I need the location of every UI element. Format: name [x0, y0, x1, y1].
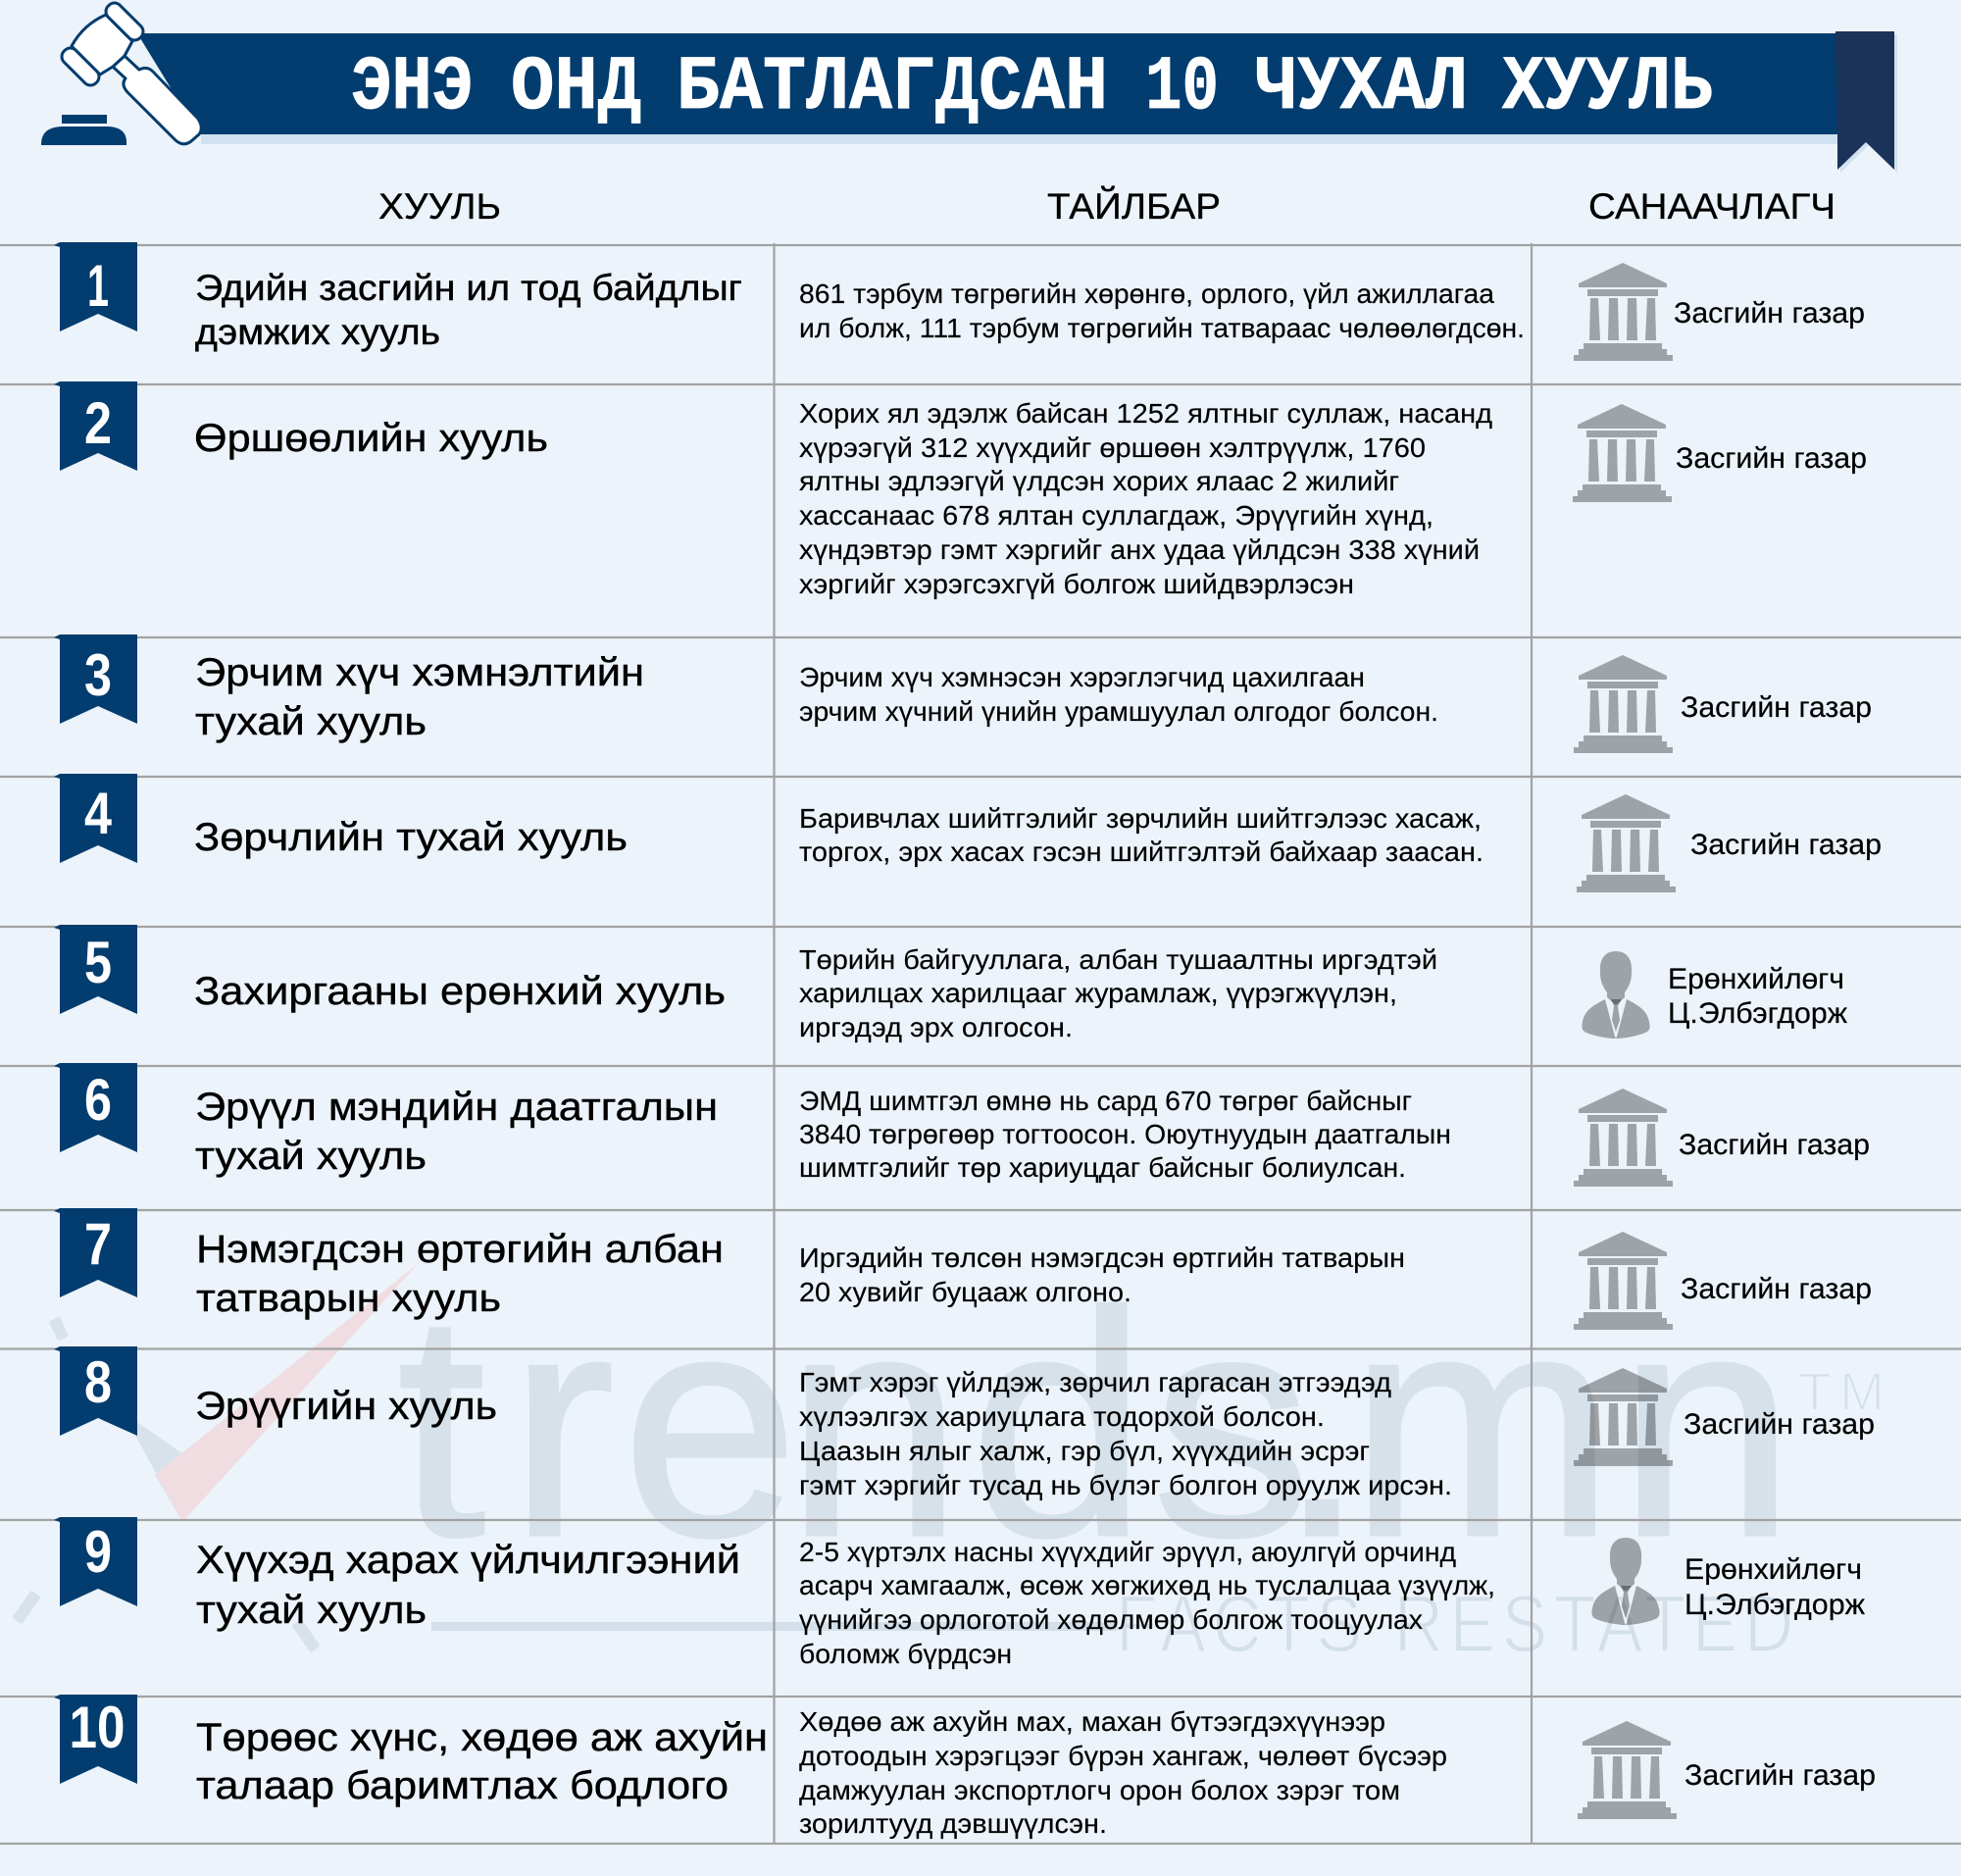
law title: Эрүүгийн хууль [195, 1385, 497, 1428]
description: Төрийн байгууллага, албан тушаалтны иргэдтэй [799, 944, 1437, 975]
watermark: trends.mn facts restated: TM [1798, 1361, 1885, 1422]
ribbon number 6: 6 [84, 1067, 112, 1133]
initiator: Засгийн газар [1684, 1759, 1876, 1792]
row 8 [54, 1346, 1875, 1500]
description [799, 1706, 1447, 1839]
law title [196, 1539, 740, 1632]
description: Эрчим хүч хэмнэсэн хэрэглэгчид цахилгаан [799, 662, 1365, 692]
law title: Төрөөс хүнс, хөдөө аж ахуйн [196, 1716, 768, 1759]
title text [351, 45, 1713, 131]
ribbon number 4: 4 [84, 781, 113, 846]
ribbon number 10 [54, 1695, 137, 1784]
description: үүнийгээ орлоготой хөдөлмөр болгож тооцуулах [799, 1604, 1423, 1635]
row 4 [54, 774, 1882, 892]
initiator: Засгийн газар [1681, 691, 1872, 724]
ribbon number 5: 5 [84, 930, 112, 995]
watermark: trends.mn facts restated: FACTS RESTATED [1116, 1578, 1800, 1669]
title text: БАТЛАГДСАН [677, 45, 1108, 131]
law title [195, 1086, 718, 1178]
description [799, 279, 1525, 343]
ribbon number 5 [54, 925, 137, 1014]
row 5 [54, 925, 1847, 1042]
row 9 [54, 1517, 1865, 1669]
initiator: Засгийн газар [1676, 442, 1867, 475]
icon: government building [1577, 794, 1676, 892]
row 3 [54, 634, 1872, 753]
description: шимтгэлийг төр хариуцдаг байсныг болиулсан. [799, 1152, 1406, 1183]
law title: талаар баримтлах бодлого [196, 1764, 729, 1807]
ribbon number 1 [54, 242, 137, 331]
law title [195, 651, 644, 743]
description: хассанаас 678 ялтан суллагдаж, Эрүүгийн хүнд, [799, 500, 1433, 531]
ribbon number 3: 3 [84, 642, 112, 708]
title text: ОНД [511, 45, 641, 131]
ribbon number 6 [54, 1063, 137, 1152]
law title: татварын хууль [196, 1277, 501, 1320]
row 1 [54, 242, 1865, 361]
icon: government building [1573, 404, 1672, 502]
title text: ЭНЭ [351, 45, 473, 131]
initiator [1668, 963, 1847, 1030]
description: Гэмт хэрэг үйлдэж, зөрчил гаргасан этгээдэд [799, 1367, 1391, 1397]
initiator: Засгийн газар [1690, 829, 1882, 861]
law title: Захиргааны ерөнхий хууль [194, 970, 726, 1013]
initiator: Ерөнхийлөгч [1668, 963, 1844, 995]
description: дотоодын хэрэгцээг бүрэн хангаж, чөлөөт бүсээр [799, 1741, 1447, 1771]
description: Хорих ял эдэлж байсан 1252 ялтныг суллаж, насанд [799, 398, 1492, 429]
description [799, 803, 1483, 867]
icon: president person [1582, 951, 1650, 1039]
description: иргэдэд эрх олгосон. [799, 1012, 1073, 1042]
description: эрчим хүчний үнийн урамшуулал олгодог болсон. [799, 696, 1438, 727]
description: гэмт хэргийг тусад нь бүлэг болгон оруулж ирсэн. [799, 1470, 1452, 1500]
icon: gavel [41, 0, 201, 145]
watermark: trends.mn facts restated [12, 1246, 1885, 1669]
law title: Зөрчлийн тухай хууль [194, 816, 628, 859]
initiator: Ц.Элбэгдорж [1668, 997, 1847, 1030]
icon: government building [1574, 655, 1673, 753]
ribbon number 8: 8 [84, 1349, 112, 1415]
initiator: Ерөнхийлөгч [1684, 1553, 1862, 1586]
ribbon number 8 [54, 1346, 137, 1436]
title text: ХУУЛЬ [1502, 45, 1713, 131]
row 6 [54, 1063, 1870, 1187]
description: ялтны эдлээгүй үлдсэн хорих ялаас 2 жилийг [799, 466, 1399, 496]
description: хүрээгүй 312 хүүхдийг өршөөн хэлтрүүлж, 1760 [799, 432, 1426, 463]
law title: Эрүүл мэндийн даатгалын [195, 1086, 718, 1129]
initiator [1684, 1553, 1865, 1621]
description [799, 662, 1438, 727]
description: 2-5 хүртэлх насны хүүхдийг эрүүл, аюулгүй орчинд [799, 1537, 1456, 1567]
law title: дэмжих хууль [195, 312, 440, 352]
title text: 10 [1145, 45, 1219, 131]
ribbon number 7 [54, 1208, 137, 1297]
description [799, 1086, 1451, 1183]
law title [195, 268, 742, 352]
law title: тухай хууль [195, 700, 427, 743]
law title [196, 1716, 768, 1807]
law title: Эрчим хүч хэмнэлтийн [195, 651, 644, 694]
description [799, 398, 1492, 599]
icon: government building [1574, 1089, 1673, 1187]
initiator: Ц.Элбэгдорж [1684, 1589, 1865, 1621]
row 2 [54, 381, 1867, 599]
description: 3840 төгрөгөөр тогтоосон. Оюутнуудын даатгалын [799, 1119, 1451, 1149]
description: ил болж, 111 тэрбум төгрөгийн татвараас чөлөөлөгдсөн. [799, 313, 1525, 343]
ribbon number 10: 10 [69, 1695, 126, 1760]
initiator: Засгийн газар [1681, 1273, 1872, 1305]
title banner [137, 31, 1897, 173]
icon: government building [1574, 1232, 1673, 1330]
description: хүлээлгэх хариуцлага тодорхой болсон. [799, 1401, 1325, 1432]
ribbon number 9: 9 [84, 1519, 112, 1585]
description: торгох, эрх хасах гэсэн шийтгэлтэй байхаар заасан. [799, 837, 1483, 867]
description: Иргэдийн төлсөн нэмэгдсэн өртгийн татварын [799, 1242, 1405, 1273]
column heading: description: ТАЙЛБАР [1047, 185, 1221, 227]
description: 20 хувийг буцааж олгоно. [799, 1277, 1131, 1307]
column heading: law: ХУУЛЬ [378, 186, 501, 227]
law title: тухай хууль [196, 1589, 427, 1632]
description: Баривчлах шийтгэлийг зөрчлийн шийтгэлээс хасаж, [799, 803, 1482, 834]
icon: government building [1578, 1721, 1677, 1819]
initiator: Засгийн газар [1684, 1408, 1875, 1441]
description: зорилтууд дэвшүүлсэн. [799, 1808, 1107, 1839]
law title: Эдийн засгийн ил тод байдлыг [195, 268, 742, 308]
description: боломж бүрдсэн [799, 1639, 1012, 1669]
description: ЭМД шимтгэл өмнө нь сард 670 төгрөг байсныг [799, 1086, 1412, 1116]
initiator: Засгийн газар [1679, 1129, 1870, 1161]
ribbon number 2 [54, 381, 137, 471]
description [799, 1242, 1405, 1307]
description [799, 1537, 1495, 1669]
title text: ЧУХАЛ [1255, 45, 1468, 131]
icon: government building [1574, 1368, 1673, 1466]
description [799, 944, 1437, 1042]
ribbon number 4 [54, 774, 137, 863]
description: Хөдөө аж ахуйн мах, махан бүтээгдэхүүнээр [799, 1706, 1385, 1737]
watermark: trends.mn facts restated: trends.mn [397, 1246, 1795, 1602]
description: хүндэвтэр гэмт хэргийг анх удаа үйлдсэн 338 хүний [799, 534, 1480, 565]
description: харилцах харилцааг журамлаж, үүрэгжүүлэн, [799, 978, 1397, 1008]
ribbon number 7: 7 [84, 1211, 112, 1277]
icon: government building [1574, 263, 1673, 361]
row 7 [54, 1208, 1872, 1330]
ribbon number 9 [54, 1517, 137, 1606]
law title: Нэмэгдсэн өртөгийн албан [196, 1228, 724, 1271]
description: 861 тэрбум төгрөгийн хөрөнгө, орлого, үйл ажиллагаа [799, 279, 1494, 309]
description: дамжуулан экспортлогч орон болох зэрэг том [799, 1775, 1400, 1805]
law title [196, 1228, 724, 1320]
law title: Өршөөлийн хууль [194, 417, 548, 460]
initiator: Засгийн газар [1674, 297, 1865, 330]
row 10 [54, 1695, 1876, 1839]
description [799, 1367, 1452, 1500]
description: Цаазын ялыг халж, гэр бүл, хүүхдийн эсрэг [799, 1436, 1370, 1466]
law title: Хүүхэд харах үйлчилгээний [196, 1539, 740, 1582]
description: асарч хамгаалж, өсөж хөгжихөд нь туслалцаа үзүүлж, [799, 1570, 1495, 1600]
icon: president person [1591, 1538, 1660, 1625]
ribbon number 2: 2 [84, 390, 112, 456]
description: хэргийг хэрэгсэхгүй болгож шийдвэрлэсэн [799, 569, 1354, 599]
ribbon number 1: 1 [87, 253, 109, 319]
ribbon number 3 [54, 634, 137, 724]
law title: тухай хууль [195, 1135, 427, 1178]
column heading: initiator: САНААЧЛАГЧ [1588, 186, 1835, 227]
